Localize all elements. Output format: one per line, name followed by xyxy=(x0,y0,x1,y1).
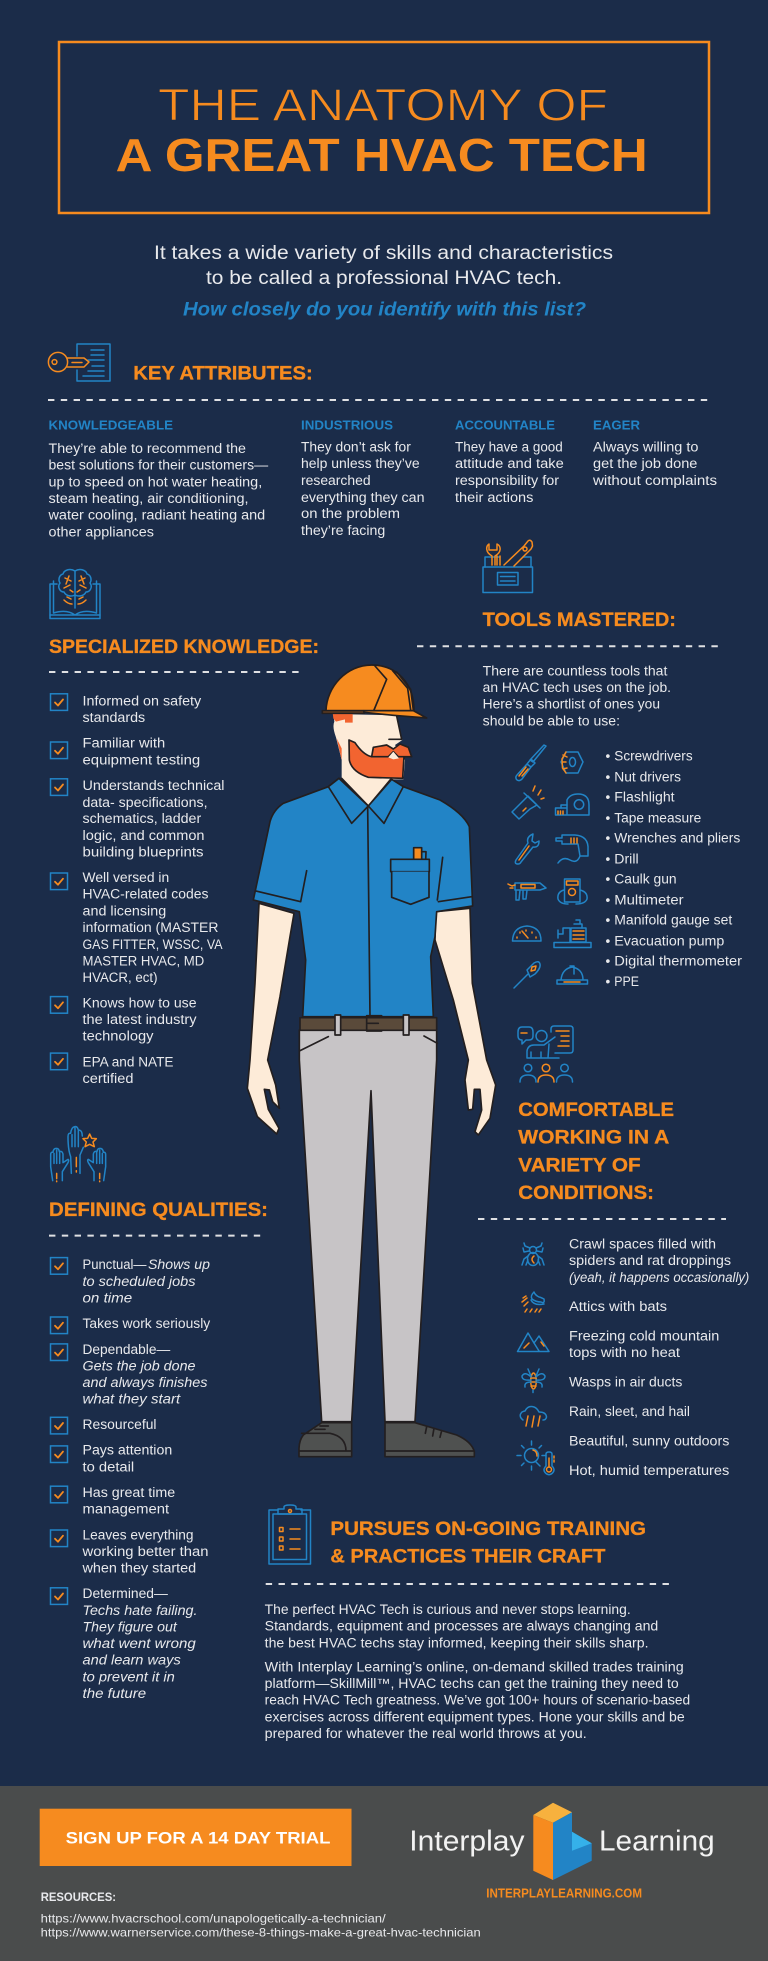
column: eager: EAGER xyxy=(593,417,641,432)
tool list: Caulk gun xyxy=(614,872,677,887)
training paragraph 2 xyxy=(265,1659,690,1741)
beard xyxy=(349,740,404,778)
column: knowledgeable: other appliances xyxy=(48,524,154,539)
resources: https://www.warnerservice.com/these-8-things-make-a-great-hvac-technician xyxy=(41,1925,481,1939)
title box: A GREAT HVAC TECH xyxy=(116,129,648,181)
checklist: defining qualities: Dependable— xyxy=(82,1342,171,1357)
checklist: specialized knowledge: Familiar with xyxy=(82,736,165,750)
icon: screwdriver xyxy=(516,745,546,781)
icon: raised hands xyxy=(51,1127,106,1182)
tool list: • xyxy=(606,749,610,764)
shirt pocket with pen xyxy=(391,848,429,904)
column: accountable: ACCOUNTABLE xyxy=(455,417,555,432)
tool list xyxy=(606,749,743,989)
column: knowledgeable: KNOWLEDGEABLE xyxy=(48,417,173,432)
illustration: HVAC technician xyxy=(247,665,496,1457)
logo: Interplay Learning: Learning xyxy=(599,1826,715,1858)
checklist: defining qualities: working better than xyxy=(81,1544,208,1559)
training paragraph 2: prepared for whatever the real world throws at you. xyxy=(265,1726,587,1741)
column: eager: get the job done xyxy=(593,456,697,471)
column: accountable: responsibility for xyxy=(455,473,560,488)
training paragraph 2: reach HVAC Tech greatness. We’ve got 100+ hours of scenario-based xyxy=(265,1693,690,1708)
column: accountable xyxy=(455,417,564,505)
heading: comfortable working in a variety of conditions: COMFORTABLE xyxy=(518,1099,674,1121)
checklist: defining qualities: Gets the job done xyxy=(82,1358,196,1374)
conditions list: spiders and rat droppings xyxy=(569,1253,731,1268)
tool list: PPE xyxy=(614,974,639,989)
icon: clipboard checklist xyxy=(269,1505,310,1564)
resources xyxy=(41,1890,481,1939)
icon: mountains xyxy=(518,1333,549,1352)
right arm xyxy=(435,908,496,1135)
intro text xyxy=(154,243,613,321)
checklist: defining qualities: Pays attention xyxy=(82,1443,172,1458)
icon: wasp xyxy=(522,1369,545,1392)
column: eager xyxy=(592,417,717,488)
icon: sun and thermometer xyxy=(517,1441,554,1475)
checklist: specialized knowledge: building blueprints xyxy=(82,844,204,859)
tool list: Flashlight xyxy=(614,790,675,805)
training paragraph 1 xyxy=(265,1602,658,1650)
checklist: specialized knowledge: and licensing xyxy=(82,903,166,918)
icon: multimeter xyxy=(558,879,587,904)
checklist: defining qualities: what went wrong xyxy=(82,1636,196,1651)
tool list: • xyxy=(606,974,610,989)
icon: digital thermometer xyxy=(514,962,540,988)
tool list: • xyxy=(606,769,610,784)
column: knowledgeable xyxy=(47,417,269,539)
column: eager: without complaints xyxy=(592,473,717,488)
icon: gauge xyxy=(512,926,541,941)
checklist: defining qualities: Shows up xyxy=(148,1257,211,1272)
belt xyxy=(300,1015,437,1035)
column: industrious xyxy=(301,417,424,538)
icon: drill xyxy=(556,835,588,863)
heading: comfortable working in a variety of conditions xyxy=(518,1099,674,1204)
training paragraph 1: the best HVAC techs stay informed, keeping their skills sharp. xyxy=(265,1635,648,1650)
heading: defining qualities: DEFINING QUALITIES: xyxy=(49,1199,268,1221)
hair behind ear xyxy=(333,713,353,760)
column: eager: Always willing to xyxy=(593,439,698,454)
checklist: defining qualities: Has great time xyxy=(82,1485,175,1500)
icon: evacuation pump xyxy=(554,920,591,948)
column: industrious: researched xyxy=(301,473,371,488)
mouth xyxy=(388,752,399,759)
logo: Interplay Learning xyxy=(409,1803,715,1880)
neck outline xyxy=(342,778,391,806)
conditions list: tops with no heat xyxy=(569,1345,680,1360)
tool list: • xyxy=(606,954,610,969)
conditions list: (yeah, it happens occasionally) xyxy=(569,1270,749,1285)
title box xyxy=(59,42,709,213)
tool list: • xyxy=(606,892,610,907)
checklist: defining qualities: Leaves everything xyxy=(82,1527,194,1542)
icon: nut xyxy=(561,752,583,773)
checklist: defining qualities: the future xyxy=(82,1686,146,1701)
checklist: defining qualities: Resourceful xyxy=(82,1417,156,1432)
heading: pursues on-going training: PURSUES ON-GOING TRAINING xyxy=(330,1518,646,1540)
heading: comfortable working in a variety of conditions: VARIETY OF xyxy=(518,1154,641,1176)
panel: working conditions xyxy=(478,1026,749,1478)
resources: RESOURCES: xyxy=(41,1890,116,1904)
tool list: Screwdrivers xyxy=(614,749,693,764)
neck and face xyxy=(333,714,405,806)
checklist: defining qualities: what they start xyxy=(82,1392,182,1407)
column: accountable: their actions xyxy=(455,490,534,505)
tools intro text xyxy=(483,663,671,728)
heading: tools mastered: TOOLS MASTERED: xyxy=(483,609,676,631)
trousers xyxy=(299,1030,437,1422)
checklist: specialized knowledge: Understands technical xyxy=(82,778,224,793)
checklist: specialized knowledge: standards xyxy=(82,710,145,725)
column: industrious: help unless they’ve xyxy=(301,456,420,471)
hard hat xyxy=(322,665,427,718)
icon: key and document xyxy=(48,344,110,381)
icon: wrench xyxy=(515,834,539,864)
tool list: Evacuation pump xyxy=(614,933,724,948)
conditions list: Attics with bats xyxy=(569,1299,667,1314)
icon: tape measure xyxy=(556,794,589,815)
checklist: specialized knowledge: EPA and NATE xyxy=(82,1054,174,1069)
training paragraph 2: exercises across different equipment types. Hone your skills and be xyxy=(265,1709,685,1724)
checklist: defining qualities: and learn ways xyxy=(82,1653,181,1668)
shirt details xyxy=(256,807,472,1017)
heading: comfortable working in a variety of conditions: CONDITIONS: xyxy=(518,1182,654,1204)
checklist: specialized knowledge: Informed on safety xyxy=(82,694,201,709)
icon: brain and book xyxy=(50,570,100,618)
checklist: defining qualities: when they started xyxy=(81,1560,196,1576)
heading: pursues on-going training: & PRACTICES THEIR CRAFT xyxy=(330,1546,605,1568)
icon: caulk gun xyxy=(508,883,546,900)
tool list: • xyxy=(606,851,610,866)
conditions list: Rain, sleet, and hail xyxy=(569,1404,690,1419)
conditions list: Crawl spaces filled with xyxy=(569,1236,716,1251)
tool list: Manifold gauge set xyxy=(614,913,733,928)
tool list: Wrenches and pliers xyxy=(614,831,741,846)
tool list: • xyxy=(606,872,610,887)
checklist: specialized knowledge: logic, and common xyxy=(82,828,204,843)
tool list: • xyxy=(606,790,610,805)
checklist: defining qualities: Takes work seriously xyxy=(82,1316,210,1331)
column: industrious: INDUSTRIOUS xyxy=(301,417,393,432)
panel: tools mastered xyxy=(417,540,743,989)
tool list: • xyxy=(606,913,610,928)
column: industrious: They don’t ask for xyxy=(301,439,411,454)
training paragraph 2: With Interplay Learning’s online, on-demand skilled trades training xyxy=(265,1659,684,1674)
panel: on-going training xyxy=(265,1505,690,1741)
condition icons xyxy=(517,1243,554,1475)
checklist: specialized knowledge: MASTER HVAC, MD xyxy=(82,953,204,968)
tool list: Nut drivers xyxy=(614,769,681,784)
checklist: specialized knowledge: schematics, ladder xyxy=(82,811,202,826)
training paragraph 2: platform—SkillMill™, HVAC techs can get the training they need to xyxy=(265,1676,679,1691)
tools intro text: should be able to use: xyxy=(483,713,620,728)
column: industrious: they’re facing xyxy=(301,523,385,538)
tool list: • xyxy=(606,810,610,825)
icon: toolbox xyxy=(483,540,532,592)
website address: INTERPLAYLEARNING.COM xyxy=(486,1885,642,1900)
shirt xyxy=(253,778,473,1017)
column: knowledgeable: up to speed on hot water heating, xyxy=(48,474,262,489)
icon: safety helmet xyxy=(557,966,588,984)
checklist: specialized knowledge: technology xyxy=(82,1029,154,1044)
icon: rain cloud xyxy=(520,1406,546,1427)
tool icons xyxy=(508,745,591,988)
checklist: defining qualities: Determined— xyxy=(82,1586,168,1601)
icon: presenter and audience xyxy=(518,1026,573,1082)
checklist: defining qualities: and always finishes xyxy=(82,1375,208,1390)
tools intro text: an HVAC tech uses on the job. xyxy=(483,680,671,695)
column: knowledgeable: water cooling, radiant heating and xyxy=(47,508,265,523)
conditions list: Hot, humid temperatures xyxy=(569,1463,730,1478)
heading: specialized knowledge: SPECIALIZED KNOWLEDGE: xyxy=(49,636,319,658)
checklist: defining qualities: to prevent it in xyxy=(82,1669,175,1684)
training paragraph 1: Standards, equipment and processes are always changing and xyxy=(265,1619,658,1634)
heading: comfortable working in a variety of conditions: WORKING IN A xyxy=(518,1127,669,1149)
training paragraph 1: The perfect HVAC Tech is curious and never stops learning. xyxy=(265,1602,631,1617)
heading: pursues on-going training xyxy=(330,1518,646,1568)
column: accountable: attitude and take xyxy=(455,456,564,471)
checklist: defining qualities xyxy=(50,1257,211,1701)
checklist: defining qualities: Punctual— xyxy=(82,1257,147,1272)
checklist: specialized knowledge: GAS FITTER, WSSC, VA xyxy=(82,937,222,952)
logo: Interplay Learning: Interplay xyxy=(409,1826,525,1858)
icon: spider xyxy=(522,1243,544,1266)
checklist: defining qualities: to scheduled jobs xyxy=(82,1274,196,1289)
intro text: to be called a professional HVAC tech. xyxy=(206,268,562,289)
column: knowledgeable: best solutions for their customers— xyxy=(48,458,269,473)
intro text: It takes a wide variety of skills and characteristics xyxy=(154,243,613,264)
tool list: Drill xyxy=(614,851,639,866)
tool list: • xyxy=(606,831,610,846)
checklist: specialized knowledge: Knows how to use xyxy=(82,996,196,1010)
column: accountable: They have a good xyxy=(455,439,563,454)
intro text: How closely do you identify with this list? xyxy=(183,300,586,321)
pocket lines xyxy=(299,1036,437,1051)
tool list: Multimeter xyxy=(614,892,684,907)
nose line xyxy=(389,716,402,739)
collar xyxy=(328,778,403,823)
column: knowledgeable: They’re able to recommend the xyxy=(48,441,246,456)
moustache xyxy=(372,744,412,757)
checklist: defining qualities: on time xyxy=(82,1290,132,1306)
call-to-action button: SIGN UP FOR A 14 DAY TRIAL xyxy=(66,1828,330,1847)
right shoe xyxy=(385,1423,474,1457)
checklist: specialized knowledge: HVAC-related codes xyxy=(82,887,209,902)
checklist: specialized knowledge: Well versed in xyxy=(82,870,169,885)
checklist: specialized knowledge: information (MASTER xyxy=(82,920,219,935)
resources: https://www.hvacrschool.com/unapologetically-a-technician/ xyxy=(41,1911,386,1925)
conditions list: Wasps in air ducts xyxy=(569,1375,683,1390)
conditions list xyxy=(569,1236,749,1478)
tools intro text: Here’s a shortlist of ones you xyxy=(483,697,660,712)
panel: specialized knowledge xyxy=(49,570,319,1086)
heading: key attributes: KEY ATTRIBUTES: xyxy=(133,362,313,384)
checklist: specialized knowledge: equipment testing xyxy=(82,752,200,767)
tool list: Digital thermometer xyxy=(614,954,743,969)
conditions list: Freezing cold mountain xyxy=(569,1328,719,1343)
checklist: defining qualities: Techs hate failing. xyxy=(82,1603,198,1618)
left shoe xyxy=(299,1423,352,1457)
left arm xyxy=(247,903,294,1134)
column: industrious: everything they can xyxy=(301,490,424,505)
checklist: specialized knowledge: certified xyxy=(82,1071,134,1086)
panel: defining qualities xyxy=(49,1127,268,1701)
icon: flashlight xyxy=(512,786,544,819)
checklist: defining qualities: They figure out xyxy=(82,1619,178,1634)
column: knowledgeable: steam heating, air conditioning, xyxy=(48,491,248,506)
title box: THE ANATOMY OF xyxy=(158,80,608,131)
checklist: specialized knowledge: the latest industry xyxy=(82,1012,197,1027)
call-to-action button xyxy=(40,1809,351,1866)
checklist: specialized knowledge xyxy=(50,694,224,1086)
checklist: specialized knowledge: data- specifications, xyxy=(82,795,208,810)
column: industrious: on the problem xyxy=(301,506,400,521)
conditions list: Beautiful, sunny outdoors xyxy=(569,1434,730,1449)
tool list: • xyxy=(606,933,610,948)
tools intro text: There are countless tools that xyxy=(483,663,668,678)
icon: bat and cloud xyxy=(522,1292,544,1312)
checklist: defining qualities: management xyxy=(82,1502,169,1517)
checklist: specialized knowledge: HVACR, ect) xyxy=(82,970,158,985)
panel: key attributes xyxy=(47,344,717,539)
footer band xyxy=(0,1786,768,1961)
tool list: Tape measure xyxy=(614,810,701,825)
checklist: defining qualities: to detail xyxy=(82,1459,134,1474)
